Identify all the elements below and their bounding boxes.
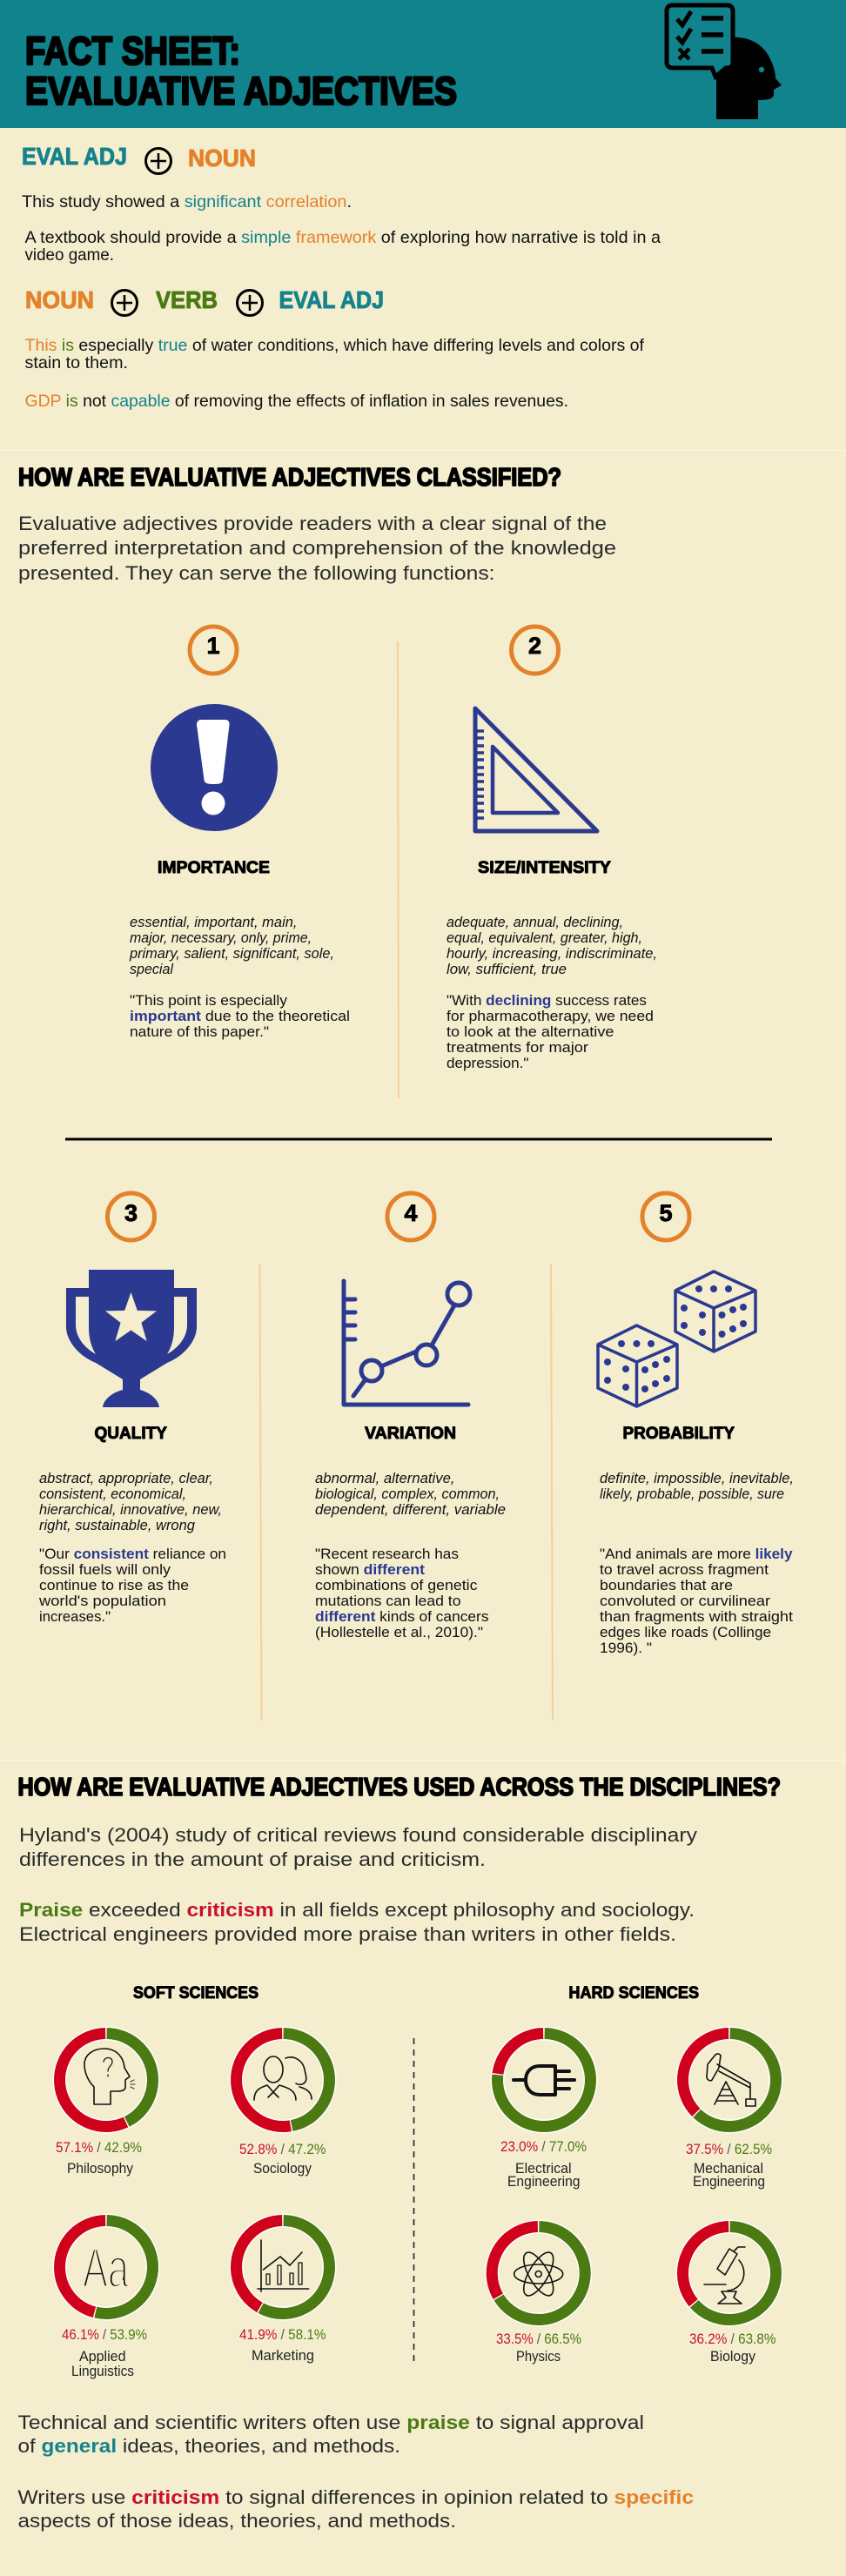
example quote: for pharmacotherapy, we need xyxy=(446,1008,654,1024)
word list: definite, impossible, inevitable, xyxy=(600,1470,794,1486)
discipline name: Mechanical xyxy=(694,2161,763,2177)
word list: abstract, appropriate, clear, xyxy=(39,1470,213,1486)
example quote: to look at the alternative xyxy=(446,1023,614,1040)
percentages: 52.8% / 47.2% xyxy=(239,2142,326,2157)
donut: electrical engineering xyxy=(498,2033,590,2190)
word list xyxy=(129,914,334,977)
donut: biology xyxy=(682,2226,776,2365)
title: FACT SHEET: xyxy=(25,29,240,73)
donut: sociology xyxy=(237,2033,329,2177)
icon: exclamation xyxy=(151,704,278,831)
discipline name: Electrical xyxy=(515,2161,571,2177)
example quote: mutations can lead to xyxy=(315,1593,461,1609)
panel: quality xyxy=(38,1193,226,1625)
donut: philosophy xyxy=(56,2033,153,2177)
example quote: boundaries that are xyxy=(600,1577,733,1593)
number badge 2 xyxy=(512,627,559,674)
number badge 4 xyxy=(387,1193,434,1240)
example sentences: noun verb adjective: This is especially true of water conditions, which have differing levels and colors of xyxy=(24,336,645,355)
discipline name: Applied xyxy=(79,2349,125,2365)
example sentences: adjective before noun: This study showed a significant correlation. xyxy=(22,192,352,211)
word list: equal, equivalent, greater, high, xyxy=(446,929,642,946)
icon: trophy xyxy=(66,1270,197,1407)
example quote xyxy=(38,1546,226,1625)
discipline name: Physics xyxy=(516,2349,561,2365)
donut: applied linguistics xyxy=(59,2221,153,2379)
donut: mechanical engineering xyxy=(682,2033,776,2190)
example quote: continue to rise as the xyxy=(39,1577,189,1593)
icon: set square ruler xyxy=(475,708,597,831)
word list: biological, complex, common, xyxy=(315,1486,500,1502)
example sentences: noun verb adjective: GDP is not capable of removing the effects of inflation in sales revenues. xyxy=(24,392,568,411)
discipline name xyxy=(693,2161,765,2190)
intro paragraph: presented. They can serve the following functions: xyxy=(18,562,494,584)
icon: electric plug xyxy=(514,2066,574,2095)
word list: primary, salient, significant, sole, xyxy=(129,945,334,962)
intro paragraph: preferred interpretation and comprehension of the knowledge xyxy=(18,537,616,559)
example quote: "Recent research has xyxy=(315,1546,459,1562)
percentages: 57.1% / 42.9% xyxy=(56,2140,142,2156)
icon: plus xyxy=(146,148,171,174)
text: Hyland study: differences in the amount of praise and criticism. xyxy=(19,1848,486,1870)
example quote: important due to the theoretical xyxy=(130,1008,350,1024)
panel: variation xyxy=(315,1193,506,1640)
example quote: world's population xyxy=(38,1593,166,1609)
percentages: 33.5% / 66.5% xyxy=(496,2331,581,2347)
text: praise conclusion: of general ideas, theories, and methods. xyxy=(17,2435,400,2457)
word list: hierarchical, innovative, new, xyxy=(39,1501,222,1518)
header banner xyxy=(0,0,846,128)
panel: probability xyxy=(598,1193,794,1656)
example quote: different kinds of cancers xyxy=(315,1608,489,1625)
discipline name: Engineering xyxy=(507,2174,580,2190)
intro paragraph xyxy=(18,513,616,584)
icon: thinking head xyxy=(84,2049,135,2104)
example quote xyxy=(600,1546,793,1656)
intro paragraph: Evaluative adjectives provide readers with a clear signal of the xyxy=(18,513,607,534)
discipline name xyxy=(71,2349,134,2379)
panel: importance xyxy=(129,627,350,1040)
text: praise conclusion: Technical and scientific writers often use praise to signal approval xyxy=(17,2412,644,2433)
heading: classification: HOW ARE EVALUATIVE ADJECTIVES CLASSIFIED? xyxy=(18,464,561,492)
discipline name: Philosophy xyxy=(67,2161,134,2177)
percentages: 36.2% / 63.8% xyxy=(689,2331,776,2347)
number badge 2: 2 xyxy=(528,633,541,659)
example quote: "With declining success rates xyxy=(446,992,647,1009)
title xyxy=(25,29,457,113)
word list: right, sustainable, wrong xyxy=(39,1517,196,1533)
word list xyxy=(39,1470,222,1533)
donut: marketing xyxy=(237,2221,329,2364)
example quote xyxy=(315,1546,489,1640)
text: praise versus criticism xyxy=(19,1899,695,1945)
example quote: "And animals are more likely xyxy=(600,1546,793,1562)
text: criticism conclusion xyxy=(17,2486,694,2532)
word list: hourly, increasing, indiscriminate, xyxy=(446,945,657,962)
word list xyxy=(600,1470,794,1502)
number badge 1: 1 xyxy=(206,633,220,659)
title: EVALUATIVE ADJECTIVES xyxy=(25,69,457,113)
discipline name: Engineering xyxy=(693,2174,765,2190)
icon: head with checklist speech bubble xyxy=(667,5,782,119)
text: praise versus criticism: Praise exceeded criticism in all fields except philosophy and sociology. xyxy=(19,1899,695,1921)
text: criticism conclusion: Writers use criticism to signal differences in opinion related to specific xyxy=(17,2486,694,2508)
example quote: "This point is especially xyxy=(130,992,288,1009)
example sentences: noun verb adjective: stain to them. xyxy=(24,353,128,372)
discipline name: Sociology xyxy=(253,2161,312,2177)
word list: likely, probable, possible, sure xyxy=(600,1486,784,1502)
number badge 1 xyxy=(190,627,237,674)
word list: special xyxy=(130,961,174,977)
example quote: nature of this paper." xyxy=(130,1023,269,1040)
icon: oil pump xyxy=(707,2054,755,2106)
example quote: convoluted or curvilinear xyxy=(600,1593,770,1609)
example sentences: adjective before noun: video game. xyxy=(24,245,114,265)
percentages: 46.1% / 53.9% xyxy=(62,2327,147,2343)
example quote: (Hollestelle et al., 2010)." xyxy=(315,1624,483,1640)
formula: noun + verb + eval adj: EVAL ADJ xyxy=(279,286,384,313)
discipline name: Biology xyxy=(710,2349,756,2365)
example quote xyxy=(130,992,350,1040)
percentages: 37.5% / 62.5% xyxy=(686,2142,772,2157)
discipline name: Marketing xyxy=(252,2348,314,2364)
icon: two people xyxy=(254,2056,312,2100)
formula: noun + verb + eval adj xyxy=(25,286,384,315)
icon: bar and line chart xyxy=(258,2240,309,2291)
donut: physics xyxy=(492,2226,585,2365)
text: praise conclusion xyxy=(17,2412,644,2457)
example quote: depression." xyxy=(446,1055,529,1071)
heading: hard sciences: HARD SCIENCES xyxy=(568,1983,699,2002)
discipline name xyxy=(507,2161,580,2190)
label: IMPORTANCE xyxy=(158,858,270,877)
example quote: combinations of genetic xyxy=(315,1577,478,1593)
number badge 3: 3 xyxy=(124,1200,138,1226)
number badge 3 xyxy=(108,1193,155,1240)
example sentences: noun verb adjective xyxy=(24,336,645,411)
example quote: increases." xyxy=(39,1608,111,1625)
icon: Aa letters: Aa xyxy=(83,2237,129,2299)
text: praise versus criticism: Electrical engineers provided more praise than writers in other fields. xyxy=(19,1923,676,1945)
icon: dice xyxy=(598,1271,755,1406)
example sentences: adjective before noun xyxy=(22,192,661,265)
example quote: edges like roads (Collinge xyxy=(600,1624,771,1640)
heading: soft sciences: SOFT SCIENCES xyxy=(133,1983,258,2002)
example sentences: adjective before noun: A textbook should provide a simple framework of exploring how narrative is told in a xyxy=(24,228,661,247)
word list xyxy=(446,914,657,977)
formula: eval adj + noun: NOUN xyxy=(188,144,256,171)
percentages: 23.0% / 77.0% xyxy=(500,2139,587,2155)
word list: essential, important, main, xyxy=(130,914,298,930)
word list: adequate, annual, declining, xyxy=(446,914,623,930)
icon: plus xyxy=(237,291,263,315)
word list: consistent, economical, xyxy=(39,1486,186,1502)
percentages: 41.9% / 58.1% xyxy=(239,2327,326,2343)
example quote: fossil fuels will only xyxy=(39,1561,171,1578)
example quote: 1996). " xyxy=(600,1640,652,1656)
formula: noun + verb + eval adj: VERB xyxy=(156,286,218,313)
icon: microscope xyxy=(704,2247,745,2304)
word list: major, necessary, only, prime, xyxy=(130,929,312,946)
label: VARIATION xyxy=(365,1424,456,1443)
icon: plus xyxy=(111,291,138,315)
word list: abnormal, alternative, xyxy=(315,1470,454,1486)
discipline name: Linguistics xyxy=(71,2364,134,2379)
text: Hyland study xyxy=(19,1824,698,1870)
example quote: "Our consistent reliance on xyxy=(39,1546,226,1562)
text: criticism conclusion: aspects of those ideas, theories, and methods. xyxy=(17,2510,456,2532)
icon: line chart xyxy=(344,1281,470,1405)
text: Hyland study: Hyland's (2004) study of critical reviews found considerable disciplinary xyxy=(19,1824,698,1846)
word list: low, sufficient, true xyxy=(446,961,567,977)
number badge 4: 4 xyxy=(404,1200,418,1226)
formula: eval adj + noun xyxy=(22,143,256,174)
icon: atom xyxy=(514,2248,563,2300)
word list: dependent, different, variable xyxy=(315,1501,506,1518)
example quote: to travel across fragment xyxy=(600,1561,769,1578)
example quote: treatments for major xyxy=(446,1039,588,1056)
label: PROBABILITY xyxy=(623,1424,735,1443)
number badge 5: 5 xyxy=(659,1200,673,1226)
formula: eval adj + noun: EVAL ADJ xyxy=(22,143,127,170)
label: QUALITY xyxy=(94,1424,167,1443)
number badge 5 xyxy=(642,1193,689,1240)
panel: size/intensity xyxy=(446,627,657,1071)
label: SIZE/INTENSITY xyxy=(478,858,611,877)
word list xyxy=(315,1470,506,1518)
example quote xyxy=(446,992,654,1071)
example quote: than fragments with straight xyxy=(600,1608,793,1625)
formula: noun + verb + eval adj: NOUN xyxy=(25,286,94,313)
example quote: shown different xyxy=(315,1561,425,1578)
